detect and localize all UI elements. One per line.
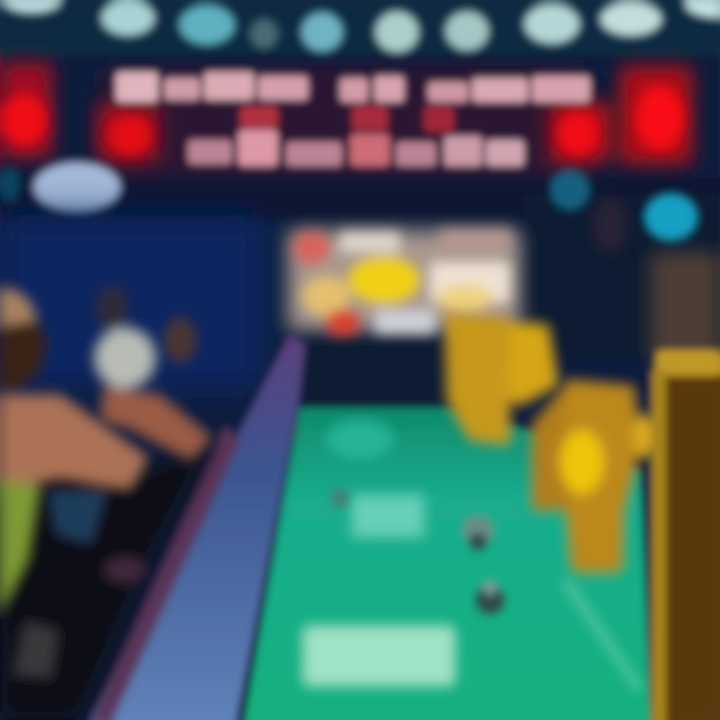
yellow barrier posts bbox=[445, 312, 657, 572]
post four bbox=[566, 380, 640, 572]
blue aisle bbox=[90, 335, 305, 720]
dark figures right wall bbox=[592, 195, 720, 362]
post one bbox=[445, 312, 510, 445]
second left red panel bbox=[98, 104, 158, 160]
ceiling lights bbox=[2, 0, 720, 53]
banner lower shadow bbox=[0, 178, 720, 220]
right red panels bbox=[550, 66, 692, 164]
red banner panels bbox=[0, 62, 692, 178]
left white sign bbox=[33, 162, 121, 212]
court centre glow bbox=[326, 420, 394, 460]
court side line bbox=[565, 580, 640, 690]
post two bbox=[508, 322, 558, 405]
right dark wall bbox=[525, 195, 720, 360]
dark crowd base bbox=[0, 440, 215, 720]
central scoreboard bbox=[288, 230, 520, 337]
dark stage under scoreboard bbox=[305, 340, 447, 406]
spectator in white bbox=[95, 286, 212, 460]
court light patch bbox=[352, 495, 424, 537]
spectators bbox=[0, 286, 215, 720]
post side glow bbox=[633, 414, 657, 458]
banner dark backing bbox=[100, 66, 590, 178]
balls on court bbox=[330, 488, 505, 615]
banner headline, blurred bbox=[116, 72, 590, 166]
left navy wall bbox=[0, 215, 265, 390]
left red panels bbox=[0, 62, 52, 158]
aisle shadow bbox=[92, 425, 240, 720]
green court floor bbox=[245, 408, 650, 720]
brown foreground post bbox=[652, 350, 720, 720]
court label patch bbox=[303, 626, 455, 686]
post three bbox=[532, 385, 566, 510]
court markings bbox=[303, 420, 640, 690]
blue side lights bbox=[0, 168, 697, 240]
post highlight bbox=[560, 430, 604, 494]
upper dark band bbox=[0, 0, 720, 56]
spectator foreground bbox=[0, 288, 148, 680]
